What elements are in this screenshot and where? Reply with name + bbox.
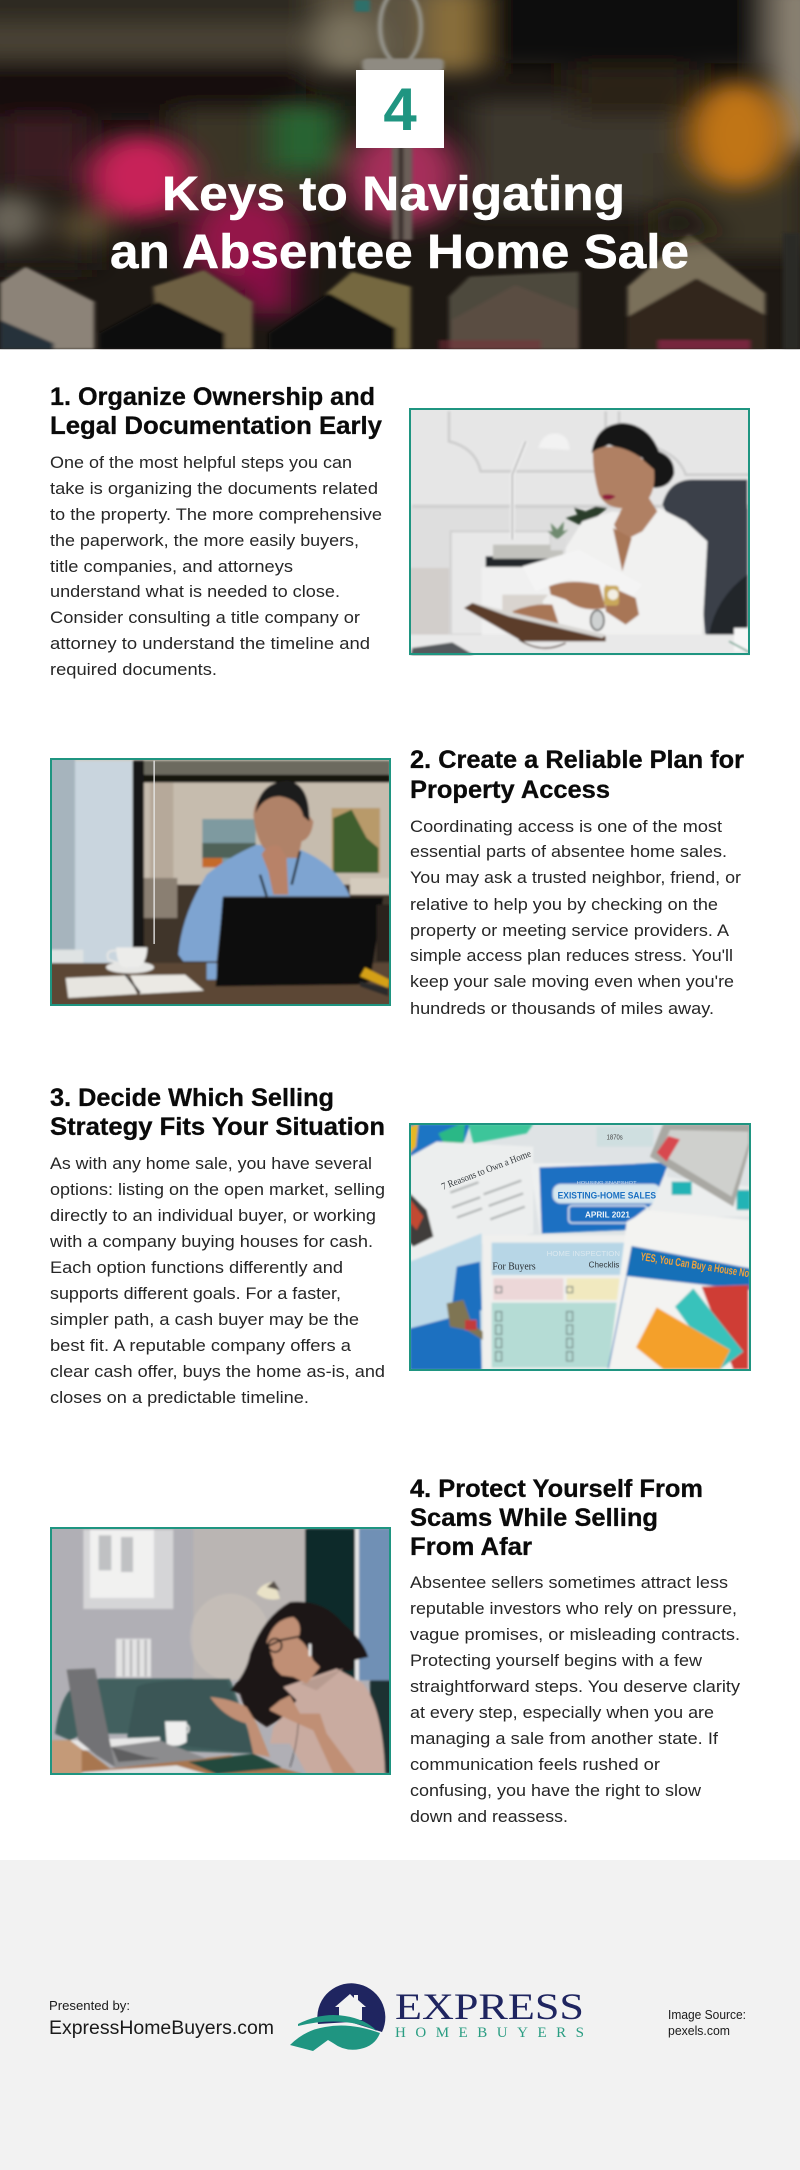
body text 3: As with any home sale, you have several (50, 1154, 372, 1173)
cup (106, 961, 154, 973)
paintings (202, 819, 256, 867)
title (110, 168, 689, 279)
sofa (55, 1679, 257, 1754)
seven reasons paper (410, 1142, 533, 1262)
heading 3: Strategy Fits Your Situation (50, 1113, 385, 1141)
document text: APRIL 2021 (585, 1210, 631, 1219)
plants (547, 521, 568, 540)
body text 1: Consider consulting a title company or (50, 608, 360, 627)
body text 4: Absentee sellers sometimes attract less (410, 1573, 728, 1592)
checklist (483, 1235, 629, 1370)
body text 2: keep your sale moving even when you're (410, 972, 734, 991)
body text 1: the paperwork, the more easily buyers, (50, 531, 359, 550)
lamp (257, 1582, 280, 1600)
body text 4: managing a sale from another state. If (410, 1729, 718, 1748)
arms and hands (210, 1697, 270, 1757)
body text 4: Protecting yourself begins with a few (410, 1651, 703, 1670)
logo: Express Homebuyers (290, 1983, 584, 2051)
body text 2 (410, 817, 741, 1018)
document text: 7 Reasons to Own a Home (440, 1148, 533, 1193)
body text 3: options: listing on the open market, selling (50, 1180, 385, 1199)
folder (464, 603, 606, 641)
body text 1: take is organizing the documents related (50, 479, 378, 498)
side table and books (482, 584, 558, 635)
desk (50, 963, 391, 1006)
body text 2: essential parts of absentee home sales. (410, 842, 727, 861)
title: an Absentee Home Sale (110, 226, 689, 279)
body text 3: closes on a predictable timeline. (50, 1388, 309, 1407)
wordmark (395, 1987, 584, 2041)
papers (70, 1737, 160, 1750)
body text 3 (49, 1154, 385, 1407)
image source: Image Source: (668, 2008, 746, 2022)
photo: man at laptop (50, 758, 391, 1006)
document text (440, 1132, 750, 1280)
heading 4 (410, 1475, 703, 1561)
shirt (270, 1669, 385, 1774)
folder (188, 1754, 282, 1774)
mug (165, 1721, 187, 1746)
keys (446, 1298, 484, 1340)
heading 3 (50, 1084, 385, 1141)
heading 1: 1. Organize Ownership and (50, 383, 375, 411)
body text 2: property or meeting service providers. A (410, 921, 730, 940)
body text 3: simpler path, a cash buyer may be the (50, 1310, 359, 1329)
hand on chin (262, 846, 288, 895)
chair (662, 480, 747, 635)
wordmark: HOMEBUYERS (395, 2025, 584, 2041)
body text 4: at every step, especially when you are (410, 1703, 714, 1722)
table (52, 1740, 303, 1774)
body text 1: attorney to understand the timeline and (50, 634, 370, 653)
photo: housing documents on a table (410, 1124, 750, 1370)
calculator (650, 1124, 750, 1207)
right side paper (650, 1177, 750, 1217)
notebook (66, 975, 137, 998)
body text 3: clear cash offer, buys the home as-is, and (50, 1362, 385, 1381)
heading 4: Scams While Selling (410, 1504, 658, 1532)
body text 4: confusing, you have the right to slow (410, 1781, 702, 1800)
keyring (355, 0, 444, 240)
document text: Checklis (589, 1259, 620, 1269)
hero banner (0, 0, 800, 349)
heading 1: Legal Documentation Early (50, 412, 382, 440)
heading 3: 3. Decide Which Selling (50, 1084, 334, 1112)
desk (409, 635, 750, 655)
body text 1: One of the most helpful steps you can (50, 453, 352, 472)
door and blue wall (305, 1529, 355, 1682)
lamp (510, 468, 517, 534)
hero photo: keys and wooden houses (0, 0, 800, 349)
paper (521, 554, 566, 578)
photo: woman reviewing documents (409, 408, 750, 655)
body text 1: required documents. (50, 660, 217, 679)
body text 3: Each option functions differently and (50, 1258, 343, 1277)
heading 2: 2. Create a Reliable Plan for (410, 746, 744, 774)
body text 4: straightforward steps. You deserve clarity (410, 1677, 741, 1696)
blouse (542, 508, 707, 635)
body text 3: directly to an individual buyer, or working (50, 1206, 376, 1225)
shirt (178, 845, 350, 961)
body text 2: Coordinating access is one of the most (410, 817, 722, 836)
section 2 (50, 746, 744, 1018)
body text 1 (50, 453, 382, 679)
body text 1: title companies, and attorneys (50, 557, 293, 576)
laptop (110, 1740, 207, 1768)
hair and bun (592, 423, 674, 488)
heading 2: Property Access (410, 776, 610, 804)
document text: HOME INSPECTION (547, 1249, 620, 1258)
document text: For Buyers (492, 1261, 536, 1272)
body text 2: simple access plan reduces stress. You'll (410, 946, 733, 965)
blue leaflet (410, 1233, 482, 1370)
wordmark: EXPRESS (395, 1987, 584, 2028)
houses (0, 267, 94, 349)
icon: house in circle with road (290, 1983, 385, 2051)
head (253, 788, 313, 858)
housing snapshot card (530, 1163, 667, 1233)
body text 3: supports different goals. For a faster, (50, 1284, 341, 1303)
image source (668, 2008, 746, 2038)
image source: pexels.com (668, 2024, 730, 2038)
document text: HOUSING SNAPSHOT (577, 1180, 637, 1185)
heading 1 (50, 383, 382, 440)
heading 4: From Afar (410, 1533, 532, 1561)
body text 2: hundreds or thousands of miles away. (410, 999, 714, 1018)
document text: YES, You Can Buy a House No (640, 1251, 750, 1280)
radiator (116, 1639, 151, 1677)
body text 4: reputable investors who rely on pressure, (410, 1599, 737, 1618)
body text 4 (410, 1573, 741, 1826)
presented by: Presented by: (49, 1998, 130, 2013)
section 3 (49, 1084, 750, 1407)
footer background (0, 1860, 800, 2170)
section 4 (50, 1475, 741, 1826)
body text 4: down and reassess. (410, 1807, 568, 1826)
body text 3: best fit. A reputable company offers a (50, 1336, 352, 1355)
presented by: ExpressHomeBuyers.com (49, 2017, 274, 2039)
heading 4: 4. Protect Yourself From (410, 1475, 703, 1503)
body text 1: to the property. The more comprehensive (50, 505, 382, 524)
yellow notebooks (360, 967, 389, 988)
window (83, 1530, 173, 1609)
section 1 (50, 383, 750, 679)
face (267, 1617, 320, 1684)
number badge (356, 70, 444, 148)
yes document (608, 1210, 750, 1370)
hair (230, 1602, 368, 1727)
presented by (49, 1998, 274, 2039)
body text 2: You may ask a trusted neighbor, friend, or (410, 868, 741, 887)
colour chips (702, 1285, 748, 1369)
body text 4: vague promises, or misleading contracts. (410, 1625, 740, 1644)
laptop (216, 897, 383, 986)
title: Keys to Navigating (162, 168, 625, 221)
document text: 1870s (607, 1132, 623, 1141)
photo: woman on a video call (50, 1527, 391, 1775)
number badge: 4 (383, 76, 417, 143)
document text: EXISTING-HOME SALES (558, 1191, 656, 1201)
heading 2 (410, 746, 744, 804)
face and neck (593, 447, 657, 541)
body text 2: relative to help you by checking on the (410, 895, 718, 914)
body text 3: with a company buying houses for cash. (49, 1232, 373, 1251)
body text 1: understand what is needed to close. (50, 582, 340, 601)
footer (0, 1860, 800, 2170)
hands (549, 582, 606, 609)
body text 4: communication feels rushed or (410, 1755, 660, 1774)
